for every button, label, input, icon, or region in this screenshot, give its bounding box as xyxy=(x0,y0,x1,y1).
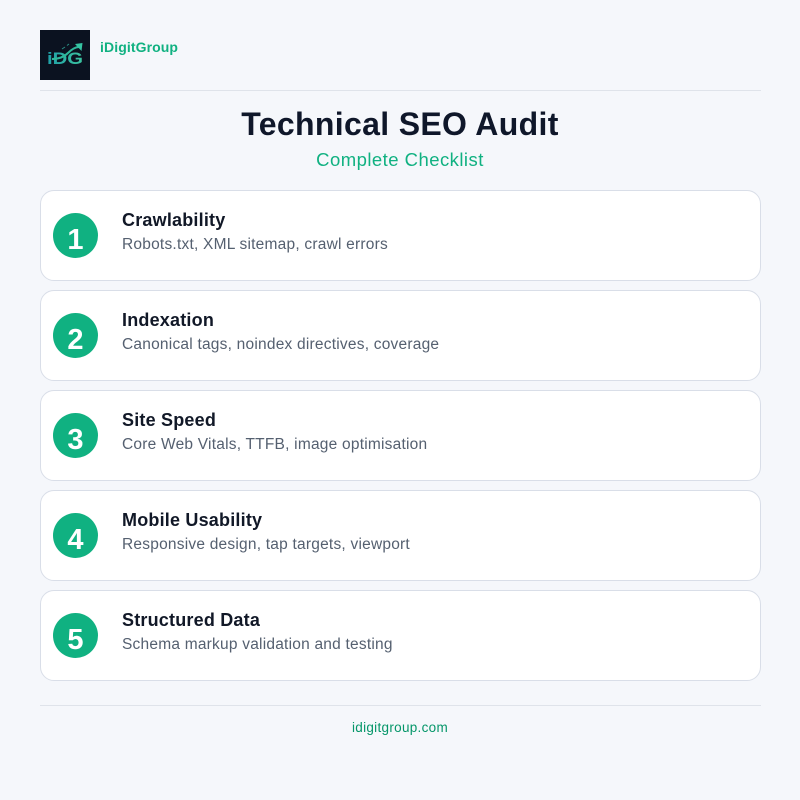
brand name: iDigitGroup xyxy=(100,39,178,55)
subtitle: Complete Checklist xyxy=(316,149,484,170)
footer url: idigitgroup.com xyxy=(352,720,448,735)
step 5 description: Schema markup validation and testing xyxy=(122,636,393,653)
step 3 heading: Site Speed xyxy=(122,410,216,430)
number badge 3 xyxy=(53,413,98,458)
step 4 heading: Mobile Usability xyxy=(122,510,262,530)
logo xyxy=(40,30,90,80)
panel: step 3 Site Speed xyxy=(40,390,761,481)
number badge 4: 4 xyxy=(67,524,84,556)
step 2 heading: Indexation xyxy=(122,310,214,330)
number badge 1: 1 xyxy=(67,224,84,256)
number badge 2: 2 xyxy=(67,324,84,356)
step 1 heading: Crawlability xyxy=(122,210,225,230)
number badge 2 xyxy=(53,313,98,358)
step 5 heading: Structured Data xyxy=(122,610,260,630)
logo: iDG xyxy=(47,49,83,68)
step 3 description: Core Web Vitals, TTFB, image optimisation xyxy=(122,436,427,453)
title: Technical SEO Audit xyxy=(241,106,559,142)
number badge 1 xyxy=(53,213,98,258)
step 4 description: Responsive design, tap targets, viewport xyxy=(122,536,410,553)
number badge 5 xyxy=(53,613,98,658)
step 2 description: Canonical tags, noindex directives, coverage xyxy=(122,336,439,353)
panel: step 5 Structured Data xyxy=(40,590,761,681)
panel: step 4 Mobile Usability xyxy=(40,490,761,581)
number badge 5: 5 xyxy=(67,624,84,656)
number badge 4 xyxy=(53,513,98,558)
number badge 3: 3 xyxy=(67,424,84,456)
panel: step 1 Crawlability xyxy=(40,190,761,281)
panel: step 2 Indexation xyxy=(40,290,761,381)
step 1 description: Robots.txt, XML sitemap, crawl errors xyxy=(122,236,388,253)
